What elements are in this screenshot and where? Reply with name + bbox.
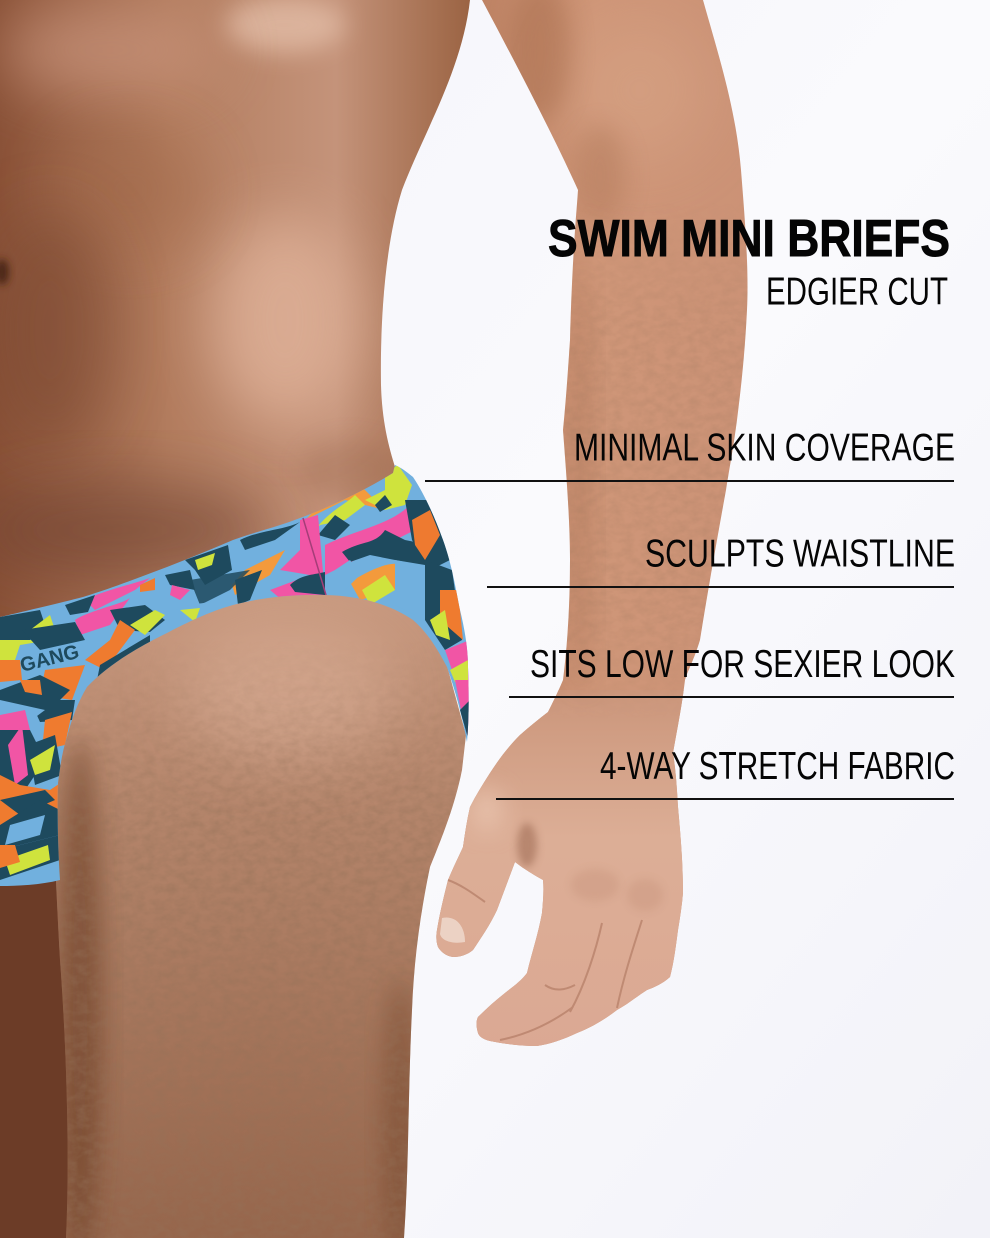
- model torso: [0, 0, 480, 650]
- front band print: [270, 515, 325, 600]
- model thigh: [40, 580, 480, 1238]
- waistband seam: [303, 518, 326, 595]
- right panel print: [325, 505, 415, 575]
- icon: thumbnail: [440, 917, 465, 943]
- front pouch print: [40, 665, 85, 700]
- model other leg: [0, 870, 110, 1238]
- print wordmark: GANG: [18, 641, 81, 677]
- title block: [548, 210, 950, 314]
- icon: finger creases: [448, 880, 642, 1040]
- model arm and hand: [430, 0, 760, 1060]
- swim mini briefs with camouflage print: [0, 460, 480, 890]
